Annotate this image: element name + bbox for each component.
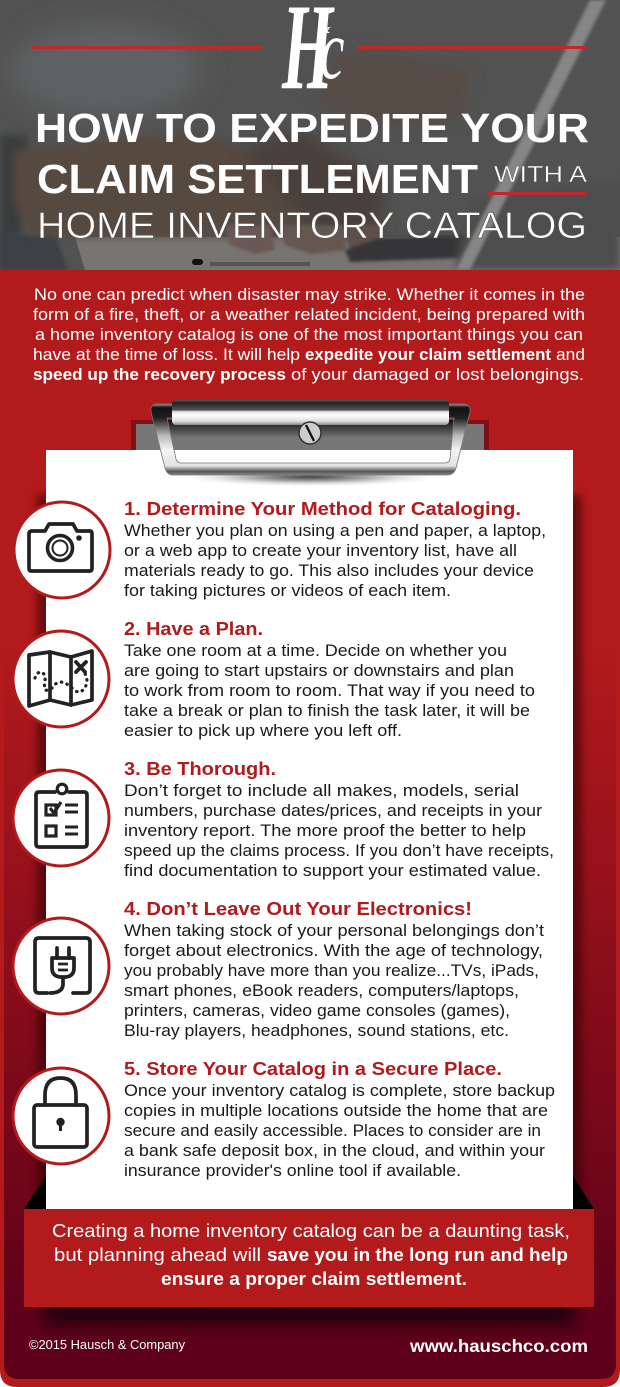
copyright: ©2015 Hausch & Company bbox=[29, 1338, 186, 1352]
title underline bbox=[487, 192, 587, 195]
step 5 body: insurance provider's online tool if available. bbox=[124, 1162, 461, 1180]
intro text: speed up the recovery process bbox=[33, 366, 286, 384]
step 3 heading: 3. Be Thorough. bbox=[124, 758, 276, 779]
title bbox=[35, 105, 589, 246]
closing banner: Creating a home inventory catalog can be a daunting task, bbox=[52, 1220, 570, 1241]
step 5 body bbox=[124, 1082, 555, 1180]
step 4 body: When taking stock of your personal belongings don’t bbox=[124, 922, 545, 940]
step 5 body: Once your inventory catalog is complete, store backup bbox=[124, 1082, 555, 1100]
step 2 body: easier to pick up where you left off. bbox=[124, 722, 402, 740]
paper bbox=[46, 450, 573, 1209]
closing banner: save you in the long run and help bbox=[267, 1244, 568, 1265]
step 5 bbox=[13, 1058, 555, 1180]
step 2 bbox=[13, 618, 535, 740]
step 4 body: Blu-ray players, headphones, sound stations, etc. bbox=[124, 1022, 509, 1040]
step 1 bbox=[14, 498, 546, 600]
step 3 bbox=[13, 758, 554, 880]
icon: plug bbox=[13, 918, 109, 1014]
icon: padlock bbox=[13, 1068, 109, 1164]
ribbon fold right bbox=[573, 1176, 594, 1209]
intro text: and bbox=[556, 346, 585, 364]
clipboard board bbox=[131, 420, 489, 460]
closing banner: but planning ahead will bbox=[54, 1244, 261, 1265]
step 2 body: to work from room to room. That way if you need to bbox=[124, 682, 535, 700]
title: CLAIM SETTLEMENT bbox=[37, 156, 478, 202]
intro text: form of a fire, theft, or a weather related incident, being prepared with bbox=[33, 306, 585, 324]
step 1 body: materials ready to go. This also includes your device bbox=[124, 562, 534, 580]
header rule right bbox=[357, 46, 587, 49]
intro text: No one can predict when disaster may strike. Whether it comes in the bbox=[34, 286, 585, 304]
icon: map bbox=[13, 631, 109, 727]
step 3 body: inventory report. The more proof the better to help bbox=[124, 822, 526, 840]
logo: & bbox=[319, 21, 331, 37]
ribbon fold left bbox=[24, 1176, 46, 1209]
step 2 body: are going to start upstairs or downstairs and plan bbox=[124, 662, 514, 680]
intro text: a home inventory catalog is one of the most important things you can bbox=[35, 326, 583, 344]
title: HOW TO EXPEDITE YOUR bbox=[35, 105, 589, 151]
step 2 heading: 2. Have a Plan. bbox=[124, 618, 263, 639]
step 4 body: forget about electronics. With the age of technology, bbox=[124, 942, 543, 960]
title: HOME INVENTORY CATALOG bbox=[37, 205, 587, 246]
header photo bbox=[0, 0, 620, 270]
paper shadow bbox=[37, 495, 582, 1209]
step 5 body: a bank safe deposit box, in the cloud, and within your bbox=[124, 1142, 546, 1160]
intro text: expedite your claim settlement bbox=[305, 346, 552, 364]
closing banner bbox=[24, 1209, 594, 1307]
clipboard clip bbox=[151, 400, 470, 487]
step 1 heading: 1. Determine Your Method for Cataloging. bbox=[124, 498, 521, 519]
step 4 body: printers, cameras, video game consoles (games), bbox=[124, 1002, 510, 1020]
step 1 body: or a web app to create your inventory list, have all bbox=[124, 542, 517, 560]
step 5 body: secure and easily accessible. Places to consider are in bbox=[124, 1122, 541, 1140]
icon: camera bbox=[14, 502, 110, 598]
intro text bbox=[33, 286, 585, 384]
step 2 body bbox=[124, 642, 535, 740]
step 4 body: smart phones, eBook readers, computers/laptops, bbox=[124, 982, 519, 1000]
icon: checklist bbox=[13, 770, 109, 866]
title: WITH A bbox=[494, 161, 588, 187]
logo: c bbox=[320, 3, 344, 97]
intro text: of your damaged or lost belongings. bbox=[291, 366, 584, 384]
step 3 body bbox=[124, 782, 554, 880]
ribbon shadow bbox=[45, 1295, 575, 1325]
step 4 bbox=[13, 898, 545, 1040]
step 5 heading: 5. Store Your Catalog in a Secure Place. bbox=[124, 1058, 502, 1079]
step 4 body bbox=[124, 922, 545, 1040]
step 1 body: for taking pictures or videos of each item. bbox=[124, 582, 451, 600]
step 1 body: Whether you plan on using a pen and paper, a laptop, bbox=[124, 522, 546, 540]
step 2 body: take a break or plan to finish the task later, it will be bbox=[124, 702, 530, 720]
step 1 body bbox=[124, 522, 546, 600]
step 3 body: Don’t forget to include all makes, models, serial bbox=[124, 782, 519, 800]
website: www.hauschco.com bbox=[409, 1336, 588, 1356]
header rule left bbox=[32, 46, 262, 49]
step 2 body: Take one room at a time. Decide on whether you bbox=[124, 642, 507, 660]
step 3 body: find documentation to support your estimated value. bbox=[124, 862, 541, 880]
step 5 body: copies in multiple locations outside the home that are bbox=[124, 1102, 548, 1120]
closing banner: ensure a proper claim settlement. bbox=[161, 1268, 467, 1289]
background gradient panel bbox=[4, 270, 616, 1379]
intro text: have at the time of loss. It will help bbox=[33, 346, 300, 364]
step 4 body: you probably have more than you realize...TVs, iPads, bbox=[124, 962, 539, 980]
step 4 heading: 4. Don’t Leave Out Your Electronics! bbox=[124, 898, 472, 919]
step 3 body: numbers, purchase dates/prices, and receipts in your bbox=[124, 802, 543, 820]
step 3 body: speed up the claims process. If you don’t have receipts, bbox=[124, 842, 554, 860]
